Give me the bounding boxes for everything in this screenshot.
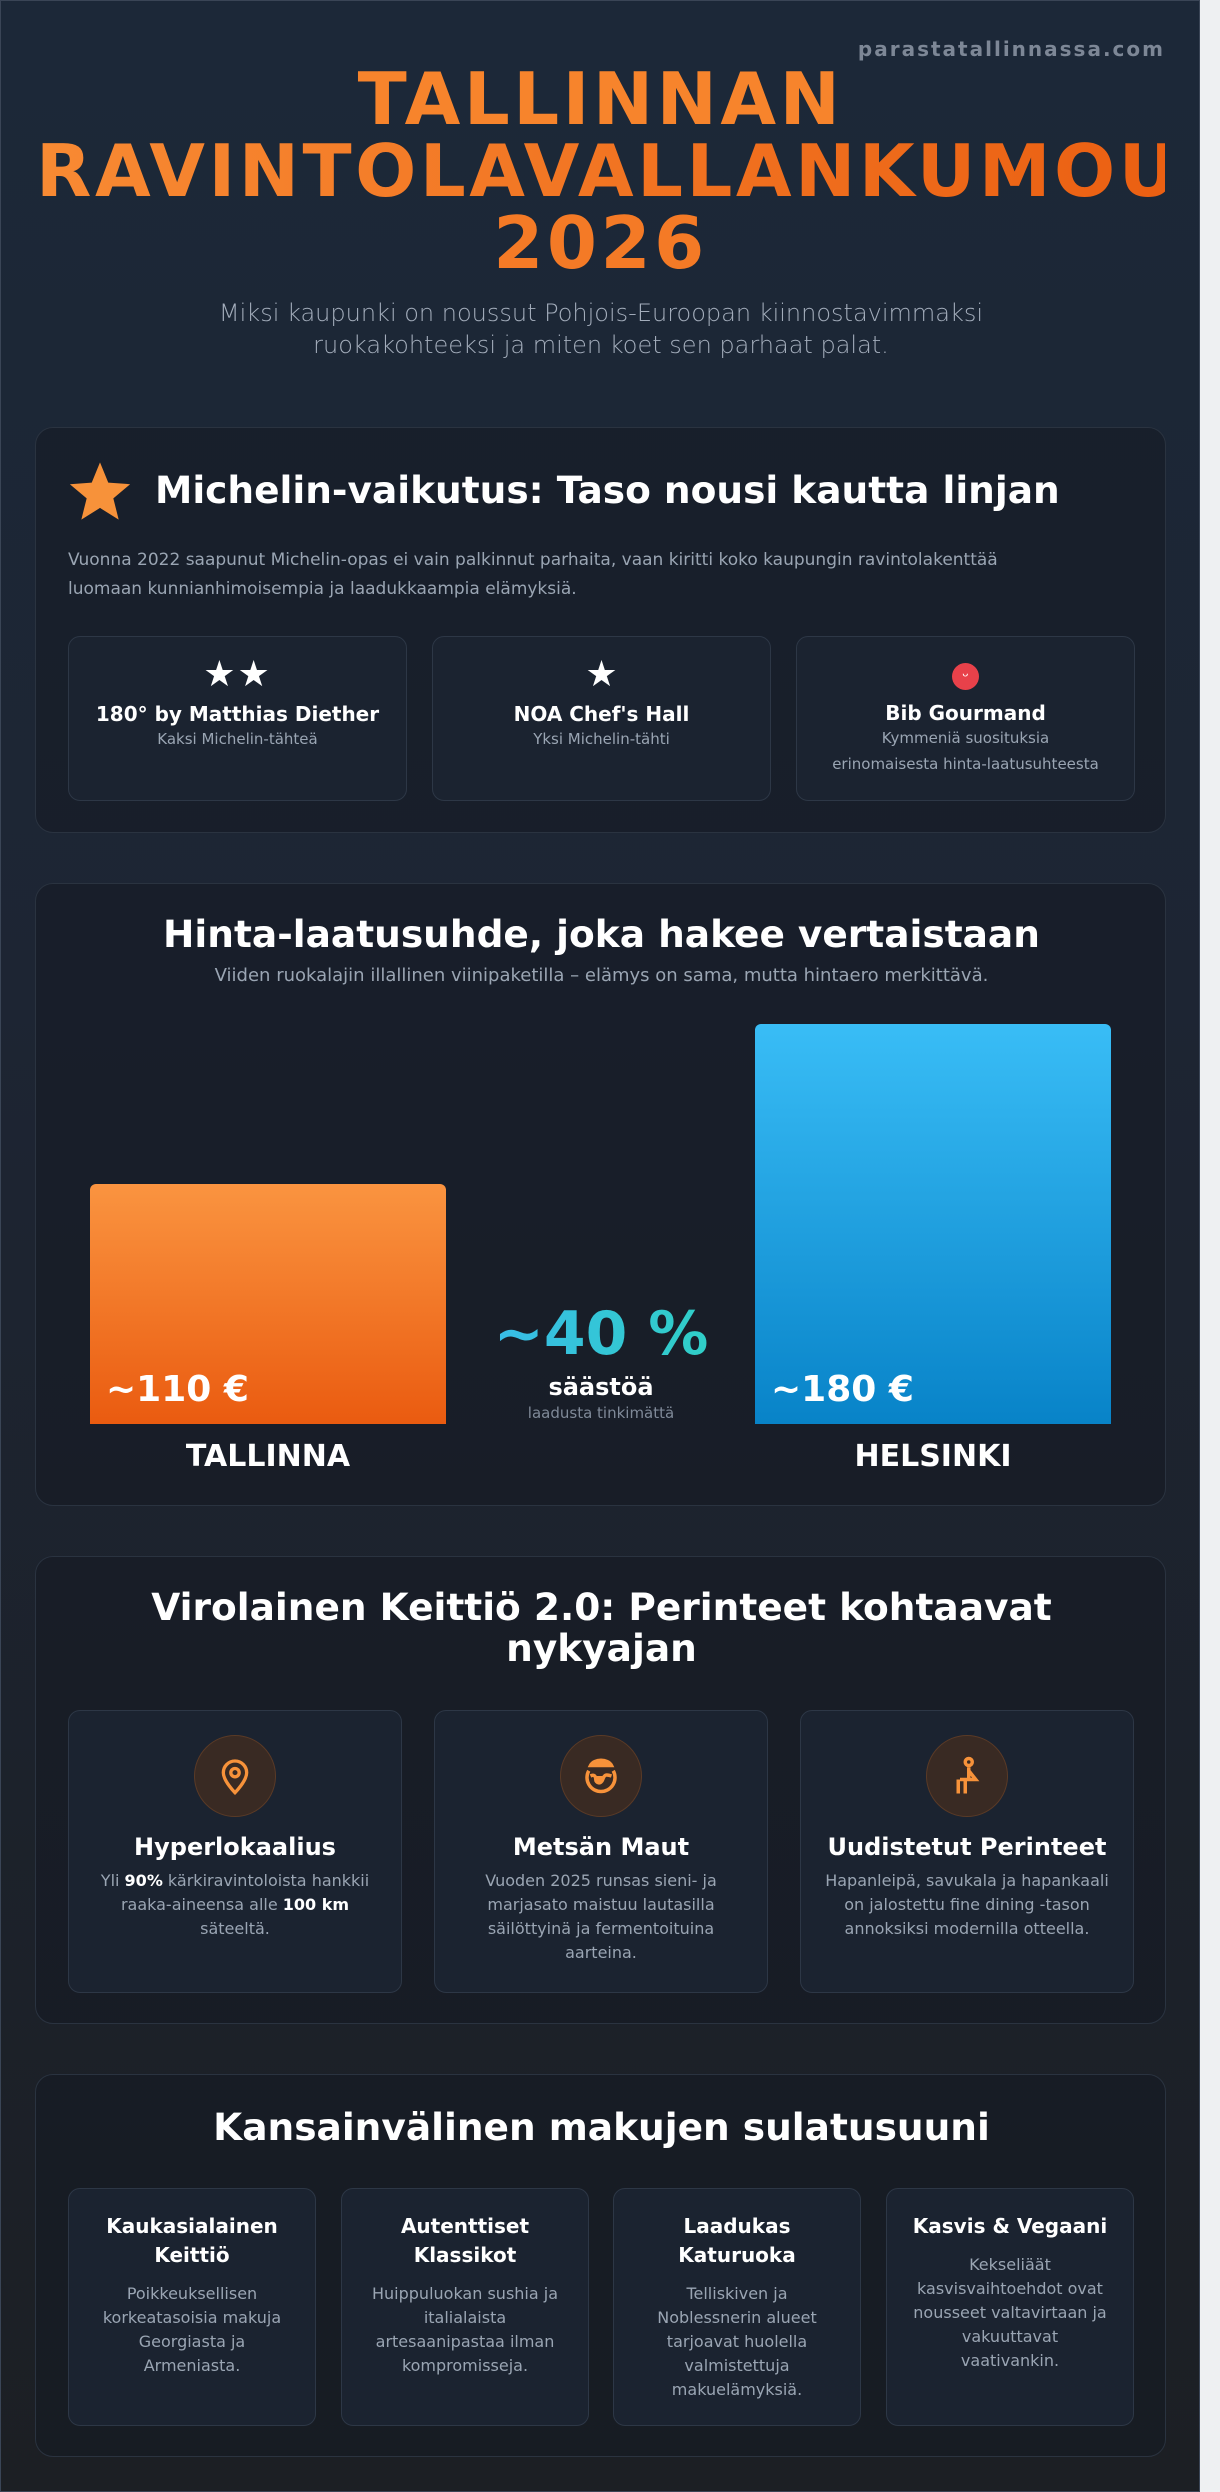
card: Metsän Maut	[434, 1710, 768, 1993]
bar: Tallinna: ~110 €	[106, 1369, 249, 1410]
card: Bib: ᵕ	[962, 667, 969, 686]
card: Hyperlokaalius	[68, 1710, 402, 1993]
bar: Helsinki: ~180 €	[771, 1369, 914, 1410]
card: Bib: erinomaisesta hinta-laatusuhteesta	[832, 755, 1099, 773]
card: 180: 180° by Matthias Diether	[96, 702, 379, 726]
callout: savings	[494, 1299, 708, 1422]
card: Uudistetut Perinteet: Uudistetut Perinteet	[828, 1833, 1106, 1861]
card: Kaukasialainen: Keittiö	[154, 2243, 230, 2267]
label: Helsinki: HELSINKI	[854, 1439, 1012, 1474]
card: Bib: Bib Gourmand	[885, 701, 1046, 725]
panel: Michelin	[35, 427, 1166, 833]
heading: Hinta-laatusuhde, joka hakee vertaistaan	[163, 912, 1040, 956]
card: Bib: Kymmeniä suosituksia	[882, 729, 1049, 747]
card: Katuruoka	[613, 2188, 861, 2426]
card: Hyperlokaalius: Yli 90% kärkiravintoloista hankkii raaka-aineensa alle 100 km säteeltä.	[101, 1871, 369, 1938]
card: Katuruoka: Telliskiven ja Noblessnerin alueet tarjoavat huolella valmistettuja makuelämyksiä.	[657, 2284, 817, 2399]
subtitle: Miksi kaupunki on noussut Pohjois-Euroopan kiinnostavimmaksi ruokakohteeksi ja miten koet sen parhaat palat.	[219, 299, 983, 359]
card: Kasvis: Kasvis & Vegaani	[913, 2214, 1107, 2238]
icon: pin	[194, 1735, 276, 1817]
label: Tallinna: TALLINNA	[186, 1439, 350, 1474]
card: 180: Kaksi Michelin-tähteä	[157, 730, 318, 748]
callout: savings: ~40 %	[494, 1299, 708, 1369]
card: NOA: ★	[585, 654, 618, 695]
card: Klassikot	[341, 2188, 589, 2426]
bar: Tallinna	[90, 1184, 446, 1424]
title	[36, 63, 1165, 279]
card: Klassikot: Huippuluokan sushia ja italialaista artesaanipastaa ilman kompromisseja.	[372, 2284, 558, 2375]
card: Metsän Maut: Vuoden 2025 runsas sieni- ja marjasato maistuu lautasilla säilöttyinä ja fermentoituina aarteina.	[485, 1871, 717, 1962]
card: NOA: NOA Chef's Hall	[514, 702, 689, 726]
card: Kasvis: vakuuttavat	[962, 2327, 1058, 2346]
card: Klassikot: Autenttiset	[401, 2214, 529, 2238]
callout: savings: säästöä	[548, 1373, 654, 1401]
card: Klassikot: Klassikot	[414, 2243, 516, 2267]
card: Kaukasialainen: Poikkeuksellisen korkeatasoisia makuja Georgiasta ja Armeniasta.	[103, 2284, 281, 2375]
icon: chef	[926, 1735, 1008, 1817]
card: 180: ★★	[203, 654, 272, 695]
card: Kaukasialainen	[68, 2188, 316, 2426]
card: Kaukasialainen: Kaukasialainen	[106, 2214, 278, 2238]
card: 180	[68, 636, 407, 801]
bar: Helsinki	[755, 1024, 1111, 1424]
card: Kasvis: vaativankin.	[961, 2351, 1059, 2370]
heading: Kansainvälinen makujen sulatusuuni	[213, 2105, 990, 2149]
domain label: parastatallinnassa.com	[858, 37, 1165, 61]
icon: star	[70, 462, 130, 520]
panel: price	[35, 883, 1166, 1506]
card: NOA	[432, 636, 771, 801]
card: Uudistetut Perinteet	[800, 1710, 1134, 1993]
paragraph: Vuonna 2022 saapunut Michelin-opas ei vain palkinnut parhaita, vaan kiritti koko kaupungin ravintolakenttää luomaan kunnianhimoisempia ja laadukkaampia elämyksiä.	[68, 550, 998, 599]
panel: Estonian cuisine	[35, 1556, 1166, 2024]
card: Katuruoka: Laadukas	[684, 2214, 790, 2238]
panel: international	[35, 2074, 1166, 2457]
card: Kasvis: Kekseliäät kasvisvaihtoehdot ovat nousseet valtavirtaan ja	[913, 2255, 1107, 2322]
callout: savings: laadusta tinkimättä	[528, 1404, 674, 1422]
icon: mushroom	[560, 1735, 642, 1817]
card: Bib	[796, 636, 1135, 801]
subheading: Viiden ruokalajin illallinen viinipaketilla – elämys on sama, mutta hintaero merkittävä.	[215, 965, 988, 986]
card: Kasvis	[886, 2188, 1134, 2426]
card: Katuruoka: Katuruoka	[678, 2243, 796, 2267]
card: Hyperlokaalius: Hyperlokaalius	[134, 1833, 336, 1861]
card: Metsän Maut: Metsän Maut	[513, 1833, 689, 1861]
card: Uudistetut Perinteet: Hapanleipä, savukala ja hapankaali on jalostettu fine dining -tason annoksiksi modernilla otteella.	[825, 1871, 1109, 1938]
card: NOA: Yksi Michelin-tähti	[533, 730, 670, 748]
heading: Michelin-vaikutus: Taso nousi kautta linjan	[155, 468, 1060, 512]
heading: Virolainen Keittiö 2.0: Perinteet kohtaavat nykyajan	[151, 1585, 1052, 1670]
